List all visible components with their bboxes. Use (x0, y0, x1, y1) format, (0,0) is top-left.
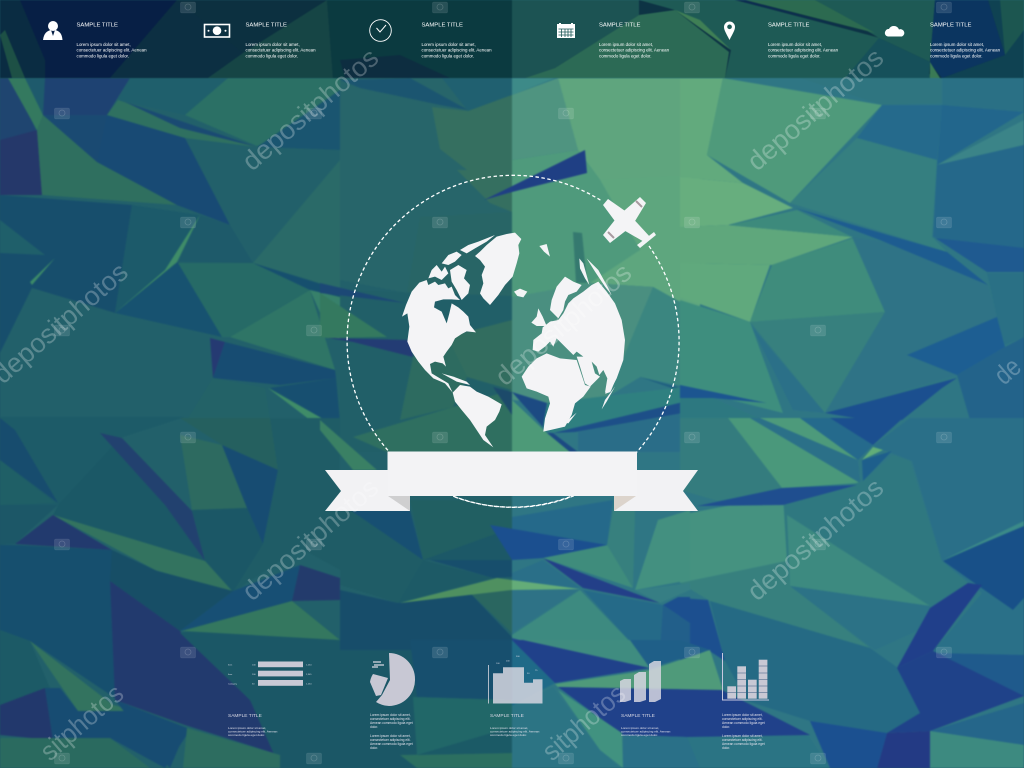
Eurasia (533, 282, 625, 393)
chart: segmented bars: Lorem ipsum dolor sit amet, (722, 713, 763, 717)
chart: step area: 300 (516, 656, 520, 658)
chart: segmented bars: Aenean commodo ligula eget (722, 721, 765, 725)
header item: person: consectetuer adipiscing elit. Aenean (76, 48, 147, 52)
right ribbon fold (614, 496, 636, 511)
header item: calendar: SAMPLE TITLE (599, 22, 641, 28)
header item: cloud: SAMPLE TITLE (930, 22, 972, 28)
chart: step area: SAMPLE TITLE (490, 713, 524, 719)
right ribbon tail (614, 470, 698, 511)
header item: money (204, 22, 316, 58)
header item: money: consectetuer adipiscing elit. Aenean (246, 48, 316, 52)
left ribbon fold (388, 496, 410, 511)
depositphotos watermarks: depositphotos (489, 257, 637, 392)
fuselage (603, 199, 651, 243)
tail (637, 232, 656, 248)
chart: rising 3D bars: SAMPLE TITLE (621, 713, 655, 719)
header item: calendar: Lorem ipsum dolor sit amet, (599, 42, 653, 47)
Caribbean islands (442, 373, 470, 385)
chart: exploded pie: Aenean commodo ligula eget (370, 721, 413, 725)
chart: horizontal bars: consectetuer adipiscing elit. Aenean (228, 730, 278, 734)
chart: horizontal bars: SAMPLE TITLE (228, 713, 262, 719)
icon: person (43, 21, 62, 40)
header item: clock: SAMPLE TITLE (422, 22, 463, 28)
depositphotos watermarks: sitphotos (536, 678, 631, 767)
header item: clock (370, 20, 492, 58)
chart: step area: Lorem ipsum dolor sit amet, (490, 726, 528, 730)
chart: horizontal bars: commodo ligula eget dolor. (228, 733, 265, 737)
header item: money: Lorem ipsum dolor sit amet, (246, 42, 300, 47)
header item: calendar: commodo ligula eget dolor. (599, 54, 651, 58)
header item: cloud (885, 22, 1001, 58)
chart: step area: 200 (506, 660, 510, 662)
header item: cloud: consectetuer adipiscing elit. Aenean (930, 48, 1001, 52)
chart: segmented bars: consectetuer adipiscing elit. (722, 738, 763, 742)
chart: horizontal bars: 100 (252, 664, 256, 666)
left ribbon tail (325, 470, 410, 511)
chart: step area: commodo ligula eget dolor. (490, 733, 527, 737)
header item: cloud: commodo ligula eget dolor. (930, 54, 982, 58)
header item: person: commodo ligula eget dolor. (76, 54, 129, 58)
lower orbit segment (455, 496, 572, 507)
ribbon banner (325, 452, 698, 511)
header item: clock: consectetuer adipiscing elit. Aenean (422, 48, 492, 52)
chart: horizontal bars: Lorem ipsum dolor sit amet, (228, 726, 266, 730)
South America (453, 385, 502, 447)
header item: person (43, 21, 147, 58)
chart: horizontal bars: 2,345 (306, 674, 312, 676)
chart: exploded pie: Lorem ipsum dolor sit amet, (370, 713, 411, 717)
airplane icon (603, 197, 656, 248)
dashed orbit (347, 175, 679, 507)
chart: horizontal bars: 1,234 (306, 664, 312, 666)
chart: segmented bars: Aenean commodo ligula eget (722, 742, 765, 746)
header item: money: commodo ligula eget dolor. (246, 54, 298, 58)
icon: calendar (557, 23, 575, 38)
chart: horizontal bars: Item (228, 673, 232, 676)
Scandinavia (550, 277, 582, 318)
chart: rising 3D bars: commodo ligula eget dolor. (621, 733, 658, 737)
depositphotos watermarks: sitphotos (34, 678, 129, 767)
chart: exploded pie (370, 653, 415, 750)
header item: location: commodo ligula eget dolor. (768, 54, 820, 58)
header item: clock: commodo ligula eget dolor. (422, 54, 474, 58)
header item: location (724, 22, 839, 58)
Svalbard (539, 244, 550, 257)
ribbon body (388, 452, 637, 496)
North America (402, 280, 476, 393)
chart: exploded pie: consectetuer adipiscing elit. (370, 738, 411, 742)
icon: map pin (724, 22, 735, 40)
chart: rising 3D bars: Lorem ipsum dolor sit amet, (621, 726, 659, 730)
chart: horizontal bars (228, 662, 312, 737)
chart: rising 3D bars: consectetuer adipiscing elit. Aenean (621, 730, 671, 734)
Greenland (475, 233, 521, 305)
chart: step area (488, 656, 542, 737)
chart: horizontal bars: 1,234 (306, 684, 312, 686)
chart: step area: 50 (527, 673, 530, 675)
Arctic islands (428, 235, 495, 300)
header item: person: SAMPLE TITLE (76, 22, 118, 28)
header item: money: SAMPLE TITLE (246, 22, 287, 28)
icon: banknote (204, 24, 230, 37)
chart: horizontal bars: 50 (252, 684, 255, 686)
header item: clock: Lorem ipsum dolor sit amet, (422, 42, 476, 47)
globe (402, 233, 625, 447)
chart: step area: 100 (496, 663, 500, 665)
header item: calendar (557, 22, 670, 58)
depositphotos watermarks: depositphotos (741, 472, 889, 607)
header item: person: Lorem ipsum dolor sit amet, (76, 42, 131, 47)
depositphotos watermarks: depositphotos (236, 42, 384, 177)
chart: segmented bars (722, 653, 769, 750)
chart: segmented bars: consectetuer adipiscing elit. (722, 717, 763, 721)
Britain (531, 308, 547, 326)
chart: segmented bars: dolor. (722, 746, 730, 750)
Africa (522, 353, 591, 432)
icon: clock (370, 20, 391, 41)
chart: exploded pie: Aenean commodo ligula eget (370, 742, 413, 746)
chart: exploded pie: dolor. (370, 725, 378, 729)
Iceland (514, 289, 527, 297)
Arctic coast slivers (565, 258, 617, 423)
icon: cloud (885, 26, 904, 36)
chart: horizontal bars: Category (228, 682, 238, 686)
header item: location: SAMPLE TITLE (768, 22, 810, 28)
chart: step area: 75 (535, 670, 538, 672)
header item: location: consectetuer adipiscing elit. Aenean (768, 48, 839, 52)
header item: location: Lorem ipsum dolor sit amet, (768, 42, 822, 47)
chart: rising 3D bars (620, 661, 671, 737)
header band (0, 0, 1024, 78)
chart: exploded pie: dolor. (370, 746, 378, 750)
wing stripes (608, 201, 642, 238)
chart: horizontal bars: Item (228, 664, 232, 666)
chart: segmented bars: Lorem ipsum dolor sit amet, (722, 734, 763, 738)
header item: calendar: consectetuer adipiscing elit. Aenean (599, 48, 670, 52)
chart: exploded pie: consectetuer adipiscing elit. (370, 717, 411, 721)
chart: exploded pie: Lorem ipsum dolor sit amet, (370, 734, 411, 738)
depositphotos watermarks: depositphotos (236, 472, 384, 607)
chart: step area: consectetuer adipiscing elit. Aenean (490, 730, 540, 734)
wings (603, 197, 646, 243)
chart: horizontal bars: 200 (252, 674, 256, 676)
chart: segmented bars: dolor. (722, 725, 730, 729)
header item: cloud: Lorem ipsum dolor sit amet, (930, 42, 984, 47)
depositphotos watermarks: depositphotos (741, 42, 889, 177)
